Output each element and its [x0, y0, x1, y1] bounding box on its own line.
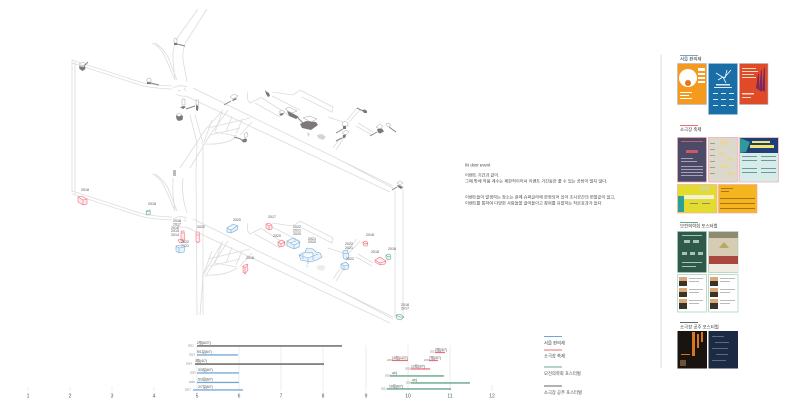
month axis: 11	[447, 394, 453, 400]
autumn bars: 10월(6/7)	[389, 384, 403, 388]
month axis: 2	[69, 394, 72, 400]
legend	[544, 336, 582, 396]
road network: upper plan	[72, 9, 403, 318]
lower plan: coloured event markers with years: 2018	[371, 250, 379, 254]
month axis: 5	[196, 394, 199, 400]
lower plan: coloured event markers with years: 2018	[173, 219, 181, 223]
text block: description: 이벤트 기간과 같이.	[465, 172, 499, 178]
group: exhibition posters: 모전의학회 포스터벌	[680, 222, 718, 230]
text block: description: 이벤트를 통하여 다양한 사람들을 끌어들이고 참여를 유발하는 작은효과가 없다	[465, 200, 602, 206]
panel: poster archive	[660, 55, 778, 368]
lower plan: coloured event markers with years	[78, 188, 409, 320]
lower plan: coloured event markers with years: 2020	[233, 218, 241, 222]
legend: 모전의학회 포스터벌	[544, 370, 581, 377]
month axis: 4	[153, 394, 156, 400]
legend: 소극장 공주 포스터벌	[544, 389, 582, 396]
autumn bars: 10월(12/7)	[392, 355, 408, 360]
lower plan: coloured event markers with years: 2020	[293, 232, 301, 236]
lower plan: coloured event markers with years: 2021	[308, 237, 316, 241]
autumn bars: 7월(3/7)	[429, 355, 441, 360]
timeline chart	[27, 340, 495, 400]
legend: 서울 판의제	[544, 340, 565, 346]
legend: 소극장 축제	[544, 352, 565, 360]
lower plan: coloured event markers with years: 2022	[346, 257, 354, 261]
spring bars: 2017	[185, 388, 191, 392]
spring bars	[185, 340, 342, 392]
lower plan: coloured event markers with years: 2015	[171, 229, 179, 233]
autumn bars: 4차	[392, 370, 398, 376]
autumn bars: 2월(3/7)	[435, 347, 447, 352]
lower plan: coloured event markers with years: 2020	[273, 234, 281, 238]
month axis: 8	[322, 394, 325, 400]
autumn bars: 4차	[412, 378, 418, 382]
isometric campus map	[72, 9, 409, 323]
lower plan: coloured event markers with years: 2021	[181, 244, 189, 248]
lower plan: coloured event markers with years: 2017	[268, 215, 276, 219]
group: theatre poster-festival posters: 소극장 공주 포스터벌	[680, 324, 719, 330]
spring bars: 9/1일(6/7)	[197, 349, 212, 354]
upper plan: dark building models	[79, 38, 403, 190]
lower plan: coloured event markers with years: 2014	[171, 233, 179, 237]
spring bars: 5/3일(6/7)	[198, 376, 213, 382]
spring bars: 2월(6/27)	[197, 340, 211, 345]
month axis: 10	[405, 394, 411, 400]
lower plan: coloured event markers with years: 2018	[401, 303, 409, 307]
lower plan: coloured event markers with years: 2016	[171, 226, 179, 230]
lower plan: coloured event markers with years: 2022	[181, 240, 189, 244]
autumn bars: 2021	[381, 386, 387, 390]
spring bars: 3월(4/7)	[195, 358, 207, 363]
spring bars: 2/7일(6/7)	[198, 384, 213, 389]
text block: description: 이벤트들이 발생하는 장소는 관례 슈퍼글라에 한정되어 있어 조시공간의 변을같이 없고,	[465, 194, 615, 200]
group: Seoul posters	[678, 55, 768, 114]
autumn bars: 2019	[385, 374, 391, 378]
lower plan: coloured event markers with years: 2017	[401, 306, 409, 310]
autumn bars: 2020	[406, 380, 412, 384]
autumn bars	[381, 347, 470, 390]
lower plan: coloured event markers with years: 2018	[148, 202, 156, 206]
text block: description: IN door event	[465, 162, 491, 168]
lower plan: coloured event markers with years: 2021	[293, 228, 301, 232]
month axis: 3	[111, 394, 114, 400]
month axis: 1	[27, 394, 30, 400]
autumn bars: 2016	[387, 358, 393, 362]
lower plan: coloured event markers with years: 2018	[81, 188, 89, 192]
group: exhibition posters	[678, 222, 738, 312]
lower plan: coloured event markers with years: 2022	[293, 225, 301, 229]
lower plan: coloured event markers with years: 2021	[345, 246, 353, 250]
autumn bars: 12월(3/7)	[411, 364, 425, 368]
lower plan: coloured event markers with years: 2018	[366, 233, 374, 237]
month axis: 12	[489, 394, 495, 400]
spring bars: 2014	[186, 362, 192, 366]
month axis: 9	[365, 394, 368, 400]
group: theatre poster-festival posters	[678, 322, 738, 368]
autumn bars: 2018	[405, 366, 411, 370]
text block: description	[465, 162, 615, 206]
text block: description: 그때 밖에 작품 계수는 제한적이어서 이벤트 기간동안 풀 수 있는 공방이 많지 않다.	[465, 178, 607, 184]
spring bars: 2016	[189, 380, 195, 384]
lower plan: coloured event markers with years: 2018	[246, 256, 254, 260]
spring bars: 3/3일(6/7)	[198, 367, 213, 372]
spring bars: 2013	[189, 352, 195, 356]
lower plan: coloured event markers with years: 2018	[388, 247, 396, 251]
lower plan: coloured event markers with years: 2020	[308, 240, 316, 244]
lower plan: coloured event markers with years: 2020	[197, 225, 205, 229]
month axis: 7	[280, 394, 283, 400]
spring bars: 2012	[188, 344, 194, 348]
group: theatre festival posters	[678, 125, 778, 213]
group: theatre festival posters: 소극장 축제	[680, 126, 701, 133]
month axis	[27, 345, 495, 400]
lower plan: coloured event markers with years: 2022	[345, 242, 353, 246]
autumn bars: 2017	[430, 350, 436, 354]
road network: lower plan	[72, 174, 393, 323]
group: Seoul posters: 서울 판의제	[680, 56, 701, 62]
lower plan: coloured event markers with years: 2017	[173, 222, 181, 226]
autumn bars: 2015	[424, 358, 430, 362]
spring bars: 2015	[190, 370, 196, 374]
month axis: 6	[238, 394, 241, 400]
